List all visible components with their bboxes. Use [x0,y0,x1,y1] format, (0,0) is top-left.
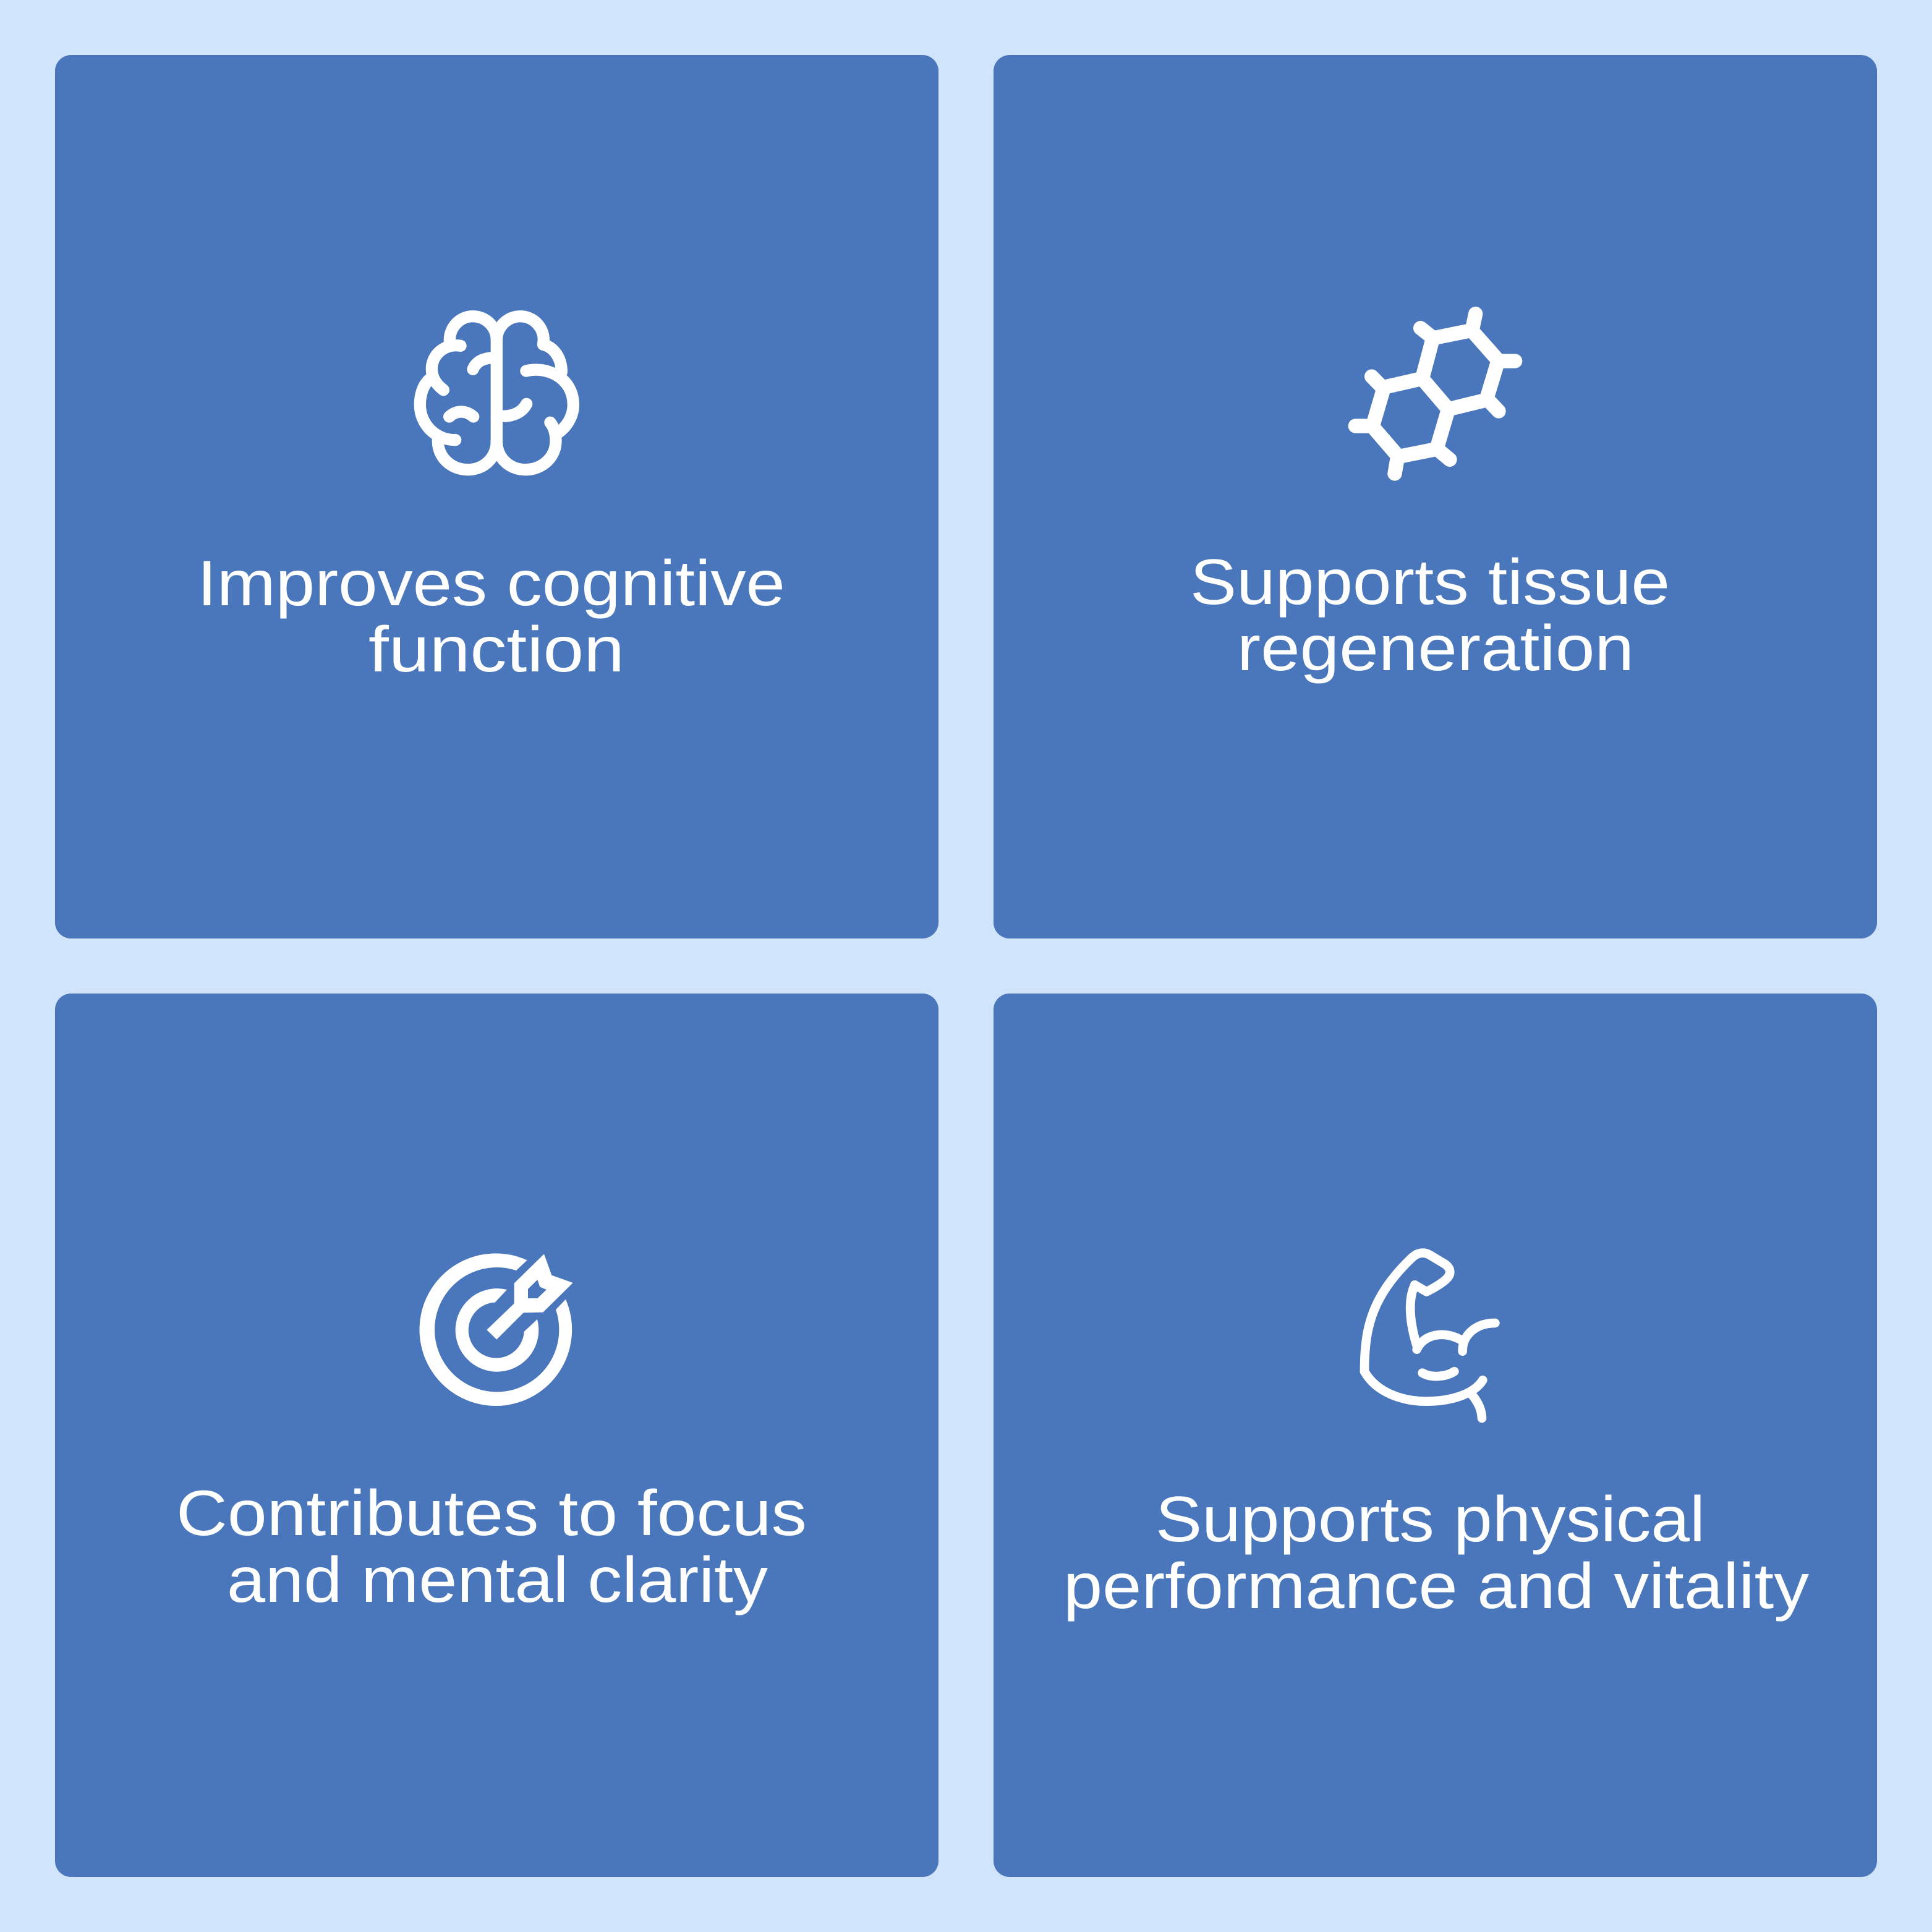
heading [176,1478,807,1616]
panel: contributes to focus and mental clarity [55,994,938,1877]
card background [55,994,938,1877]
heading [197,548,785,686]
card background [55,55,938,938]
heading: Improves cognitive [197,548,785,619]
heading [1063,1484,1809,1622]
heading: Supports tissue [1190,547,1670,618]
heading: and mental clarity [227,1544,768,1616]
card background [994,994,1877,1877]
heading [1190,547,1670,684]
heading: function [368,614,624,686]
heading: performance and vitality [1063,1551,1809,1622]
panel: improves cognitive function [55,55,938,938]
icon: molecule [1355,314,1515,474]
icon: target with arrow [420,1253,573,1406]
heading: regeneration [1237,613,1634,684]
heading: Contributes to focus [176,1478,807,1549]
icon: brain [420,317,573,470]
card background [994,55,1877,938]
icon: flexed arm [1364,1253,1495,1418]
heading: Supports physical [1155,1484,1705,1555]
panel: supports tissue regeneration [994,55,1877,938]
panel: supports physical performance and vitality [994,994,1877,1877]
